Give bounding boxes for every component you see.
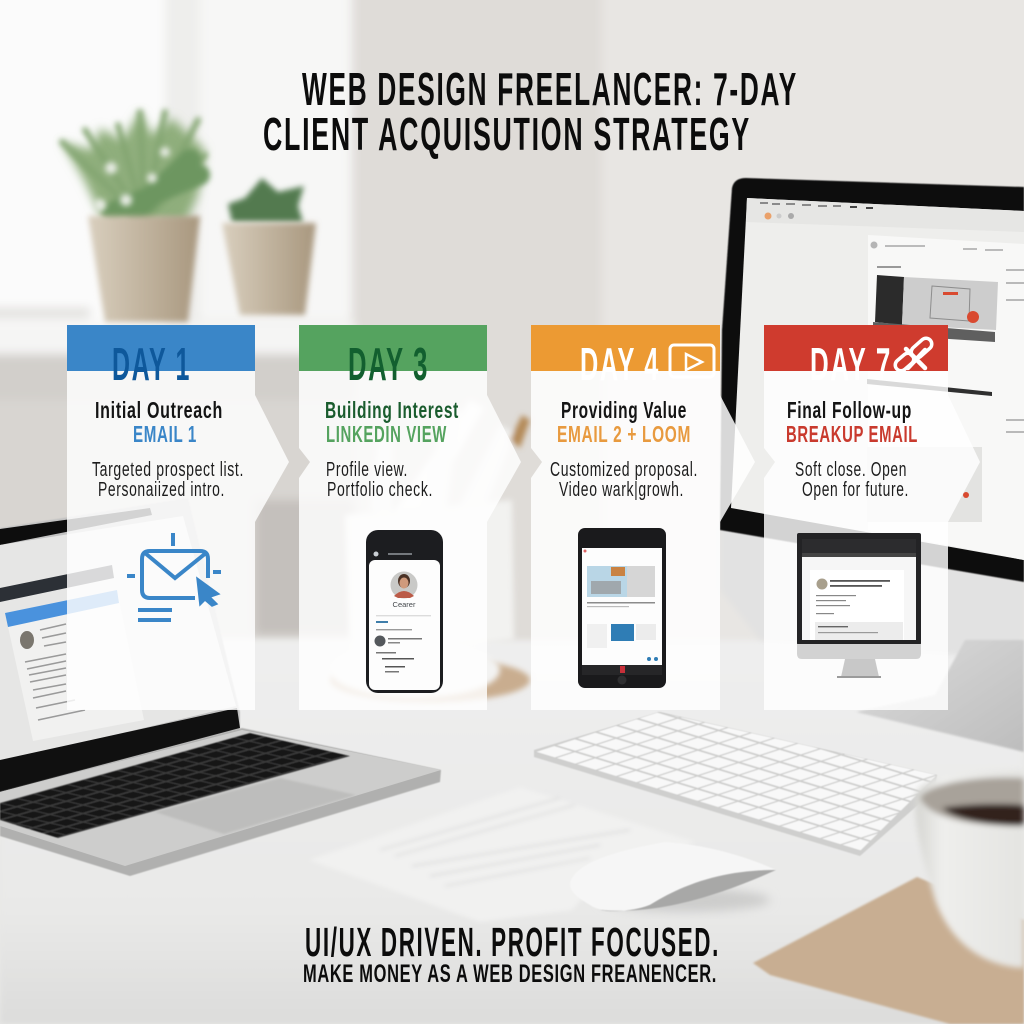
panel 3 heading: Providing Value: [561, 397, 687, 423]
icon: desktop with email: [797, 533, 921, 678]
panel: Day 3: [299, 325, 521, 710]
day 7 label: DAY 7: [810, 338, 892, 390]
desk surface: [0, 640, 1024, 1024]
panel: Day 7: [764, 325, 980, 710]
panel 2 description: Portfolio check.: [327, 479, 433, 501]
panel 1 card with arrow: [67, 325, 289, 710]
panel: Day 4: [531, 325, 755, 710]
pencil cup with pencils: [330, 400, 530, 702]
icon: envelope with cursor: [127, 533, 221, 620]
panel 2 header: [299, 325, 487, 371]
day 3 label: DAY 3: [348, 338, 429, 390]
wall and window: [0, 0, 1024, 680]
panel 3 description: Customized proposal.: [550, 459, 698, 481]
plants: [62, 112, 316, 322]
title: [263, 63, 798, 160]
panel 4 card with arrow: [764, 325, 980, 710]
footer tagline: [303, 919, 720, 988]
footer tagline: MAKE MONEY AS A WEB DESIGN FREANENCER.: [303, 960, 717, 988]
panel 4 heading: Final Follow-up: [787, 397, 912, 423]
panel 4 header: [764, 325, 948, 371]
day 4 label: DAY 4: [580, 338, 660, 390]
icon: phone with profile: [366, 530, 443, 693]
desktop monitor: [720, 178, 1024, 752]
paper sheet: [309, 787, 695, 922]
panel 4 description: [795, 459, 909, 501]
panel 2 channel: LINKEDIN VIEW: [326, 421, 447, 447]
panel 3 description: Video wark|growh.: [559, 479, 684, 501]
panel 2 heading: Building Interest: [325, 397, 459, 423]
wooden coaster: [753, 877, 1024, 1024]
panel 4 channel: BREAKUP EMAIL: [786, 421, 918, 447]
panel 2 description: Profile view.: [326, 459, 408, 481]
panel 1 description: Targeted prospect list.: [92, 459, 244, 481]
icon: tablet with proposal: [578, 528, 666, 688]
panel 3 channel: EMAIL 2 + LOOM: [557, 421, 691, 447]
panel: Day 1: [67, 325, 289, 710]
white keyboard: [534, 712, 937, 856]
panel 1 channel: EMAIL 1: [133, 421, 197, 447]
magic mouse: [570, 842, 776, 912]
icon: phone with profile: Cearer: [393, 600, 416, 609]
panel 4 description: Open for future.: [802, 479, 909, 501]
panel 4 description: Soft close. Open: [795, 459, 907, 481]
panel 2 description: [326, 459, 433, 501]
panel 1 description: Personaiized intro.: [98, 479, 225, 501]
panel 3 description: [550, 459, 698, 501]
panel 2 card with arrow: [299, 325, 521, 710]
icon: video play: [670, 345, 714, 377]
day 1 label: DAY 1: [112, 338, 191, 390]
panel 1 heading: Initial Outreach: [95, 397, 223, 423]
icon: broken link: [901, 344, 926, 368]
laptop: [0, 498, 441, 876]
panel 1 header: [67, 325, 255, 371]
panel 1 description: [92, 459, 244, 501]
panel 3 header: [531, 325, 720, 371]
panel 3 card with arrow: [531, 325, 755, 710]
coffee cup: [915, 770, 1024, 968]
